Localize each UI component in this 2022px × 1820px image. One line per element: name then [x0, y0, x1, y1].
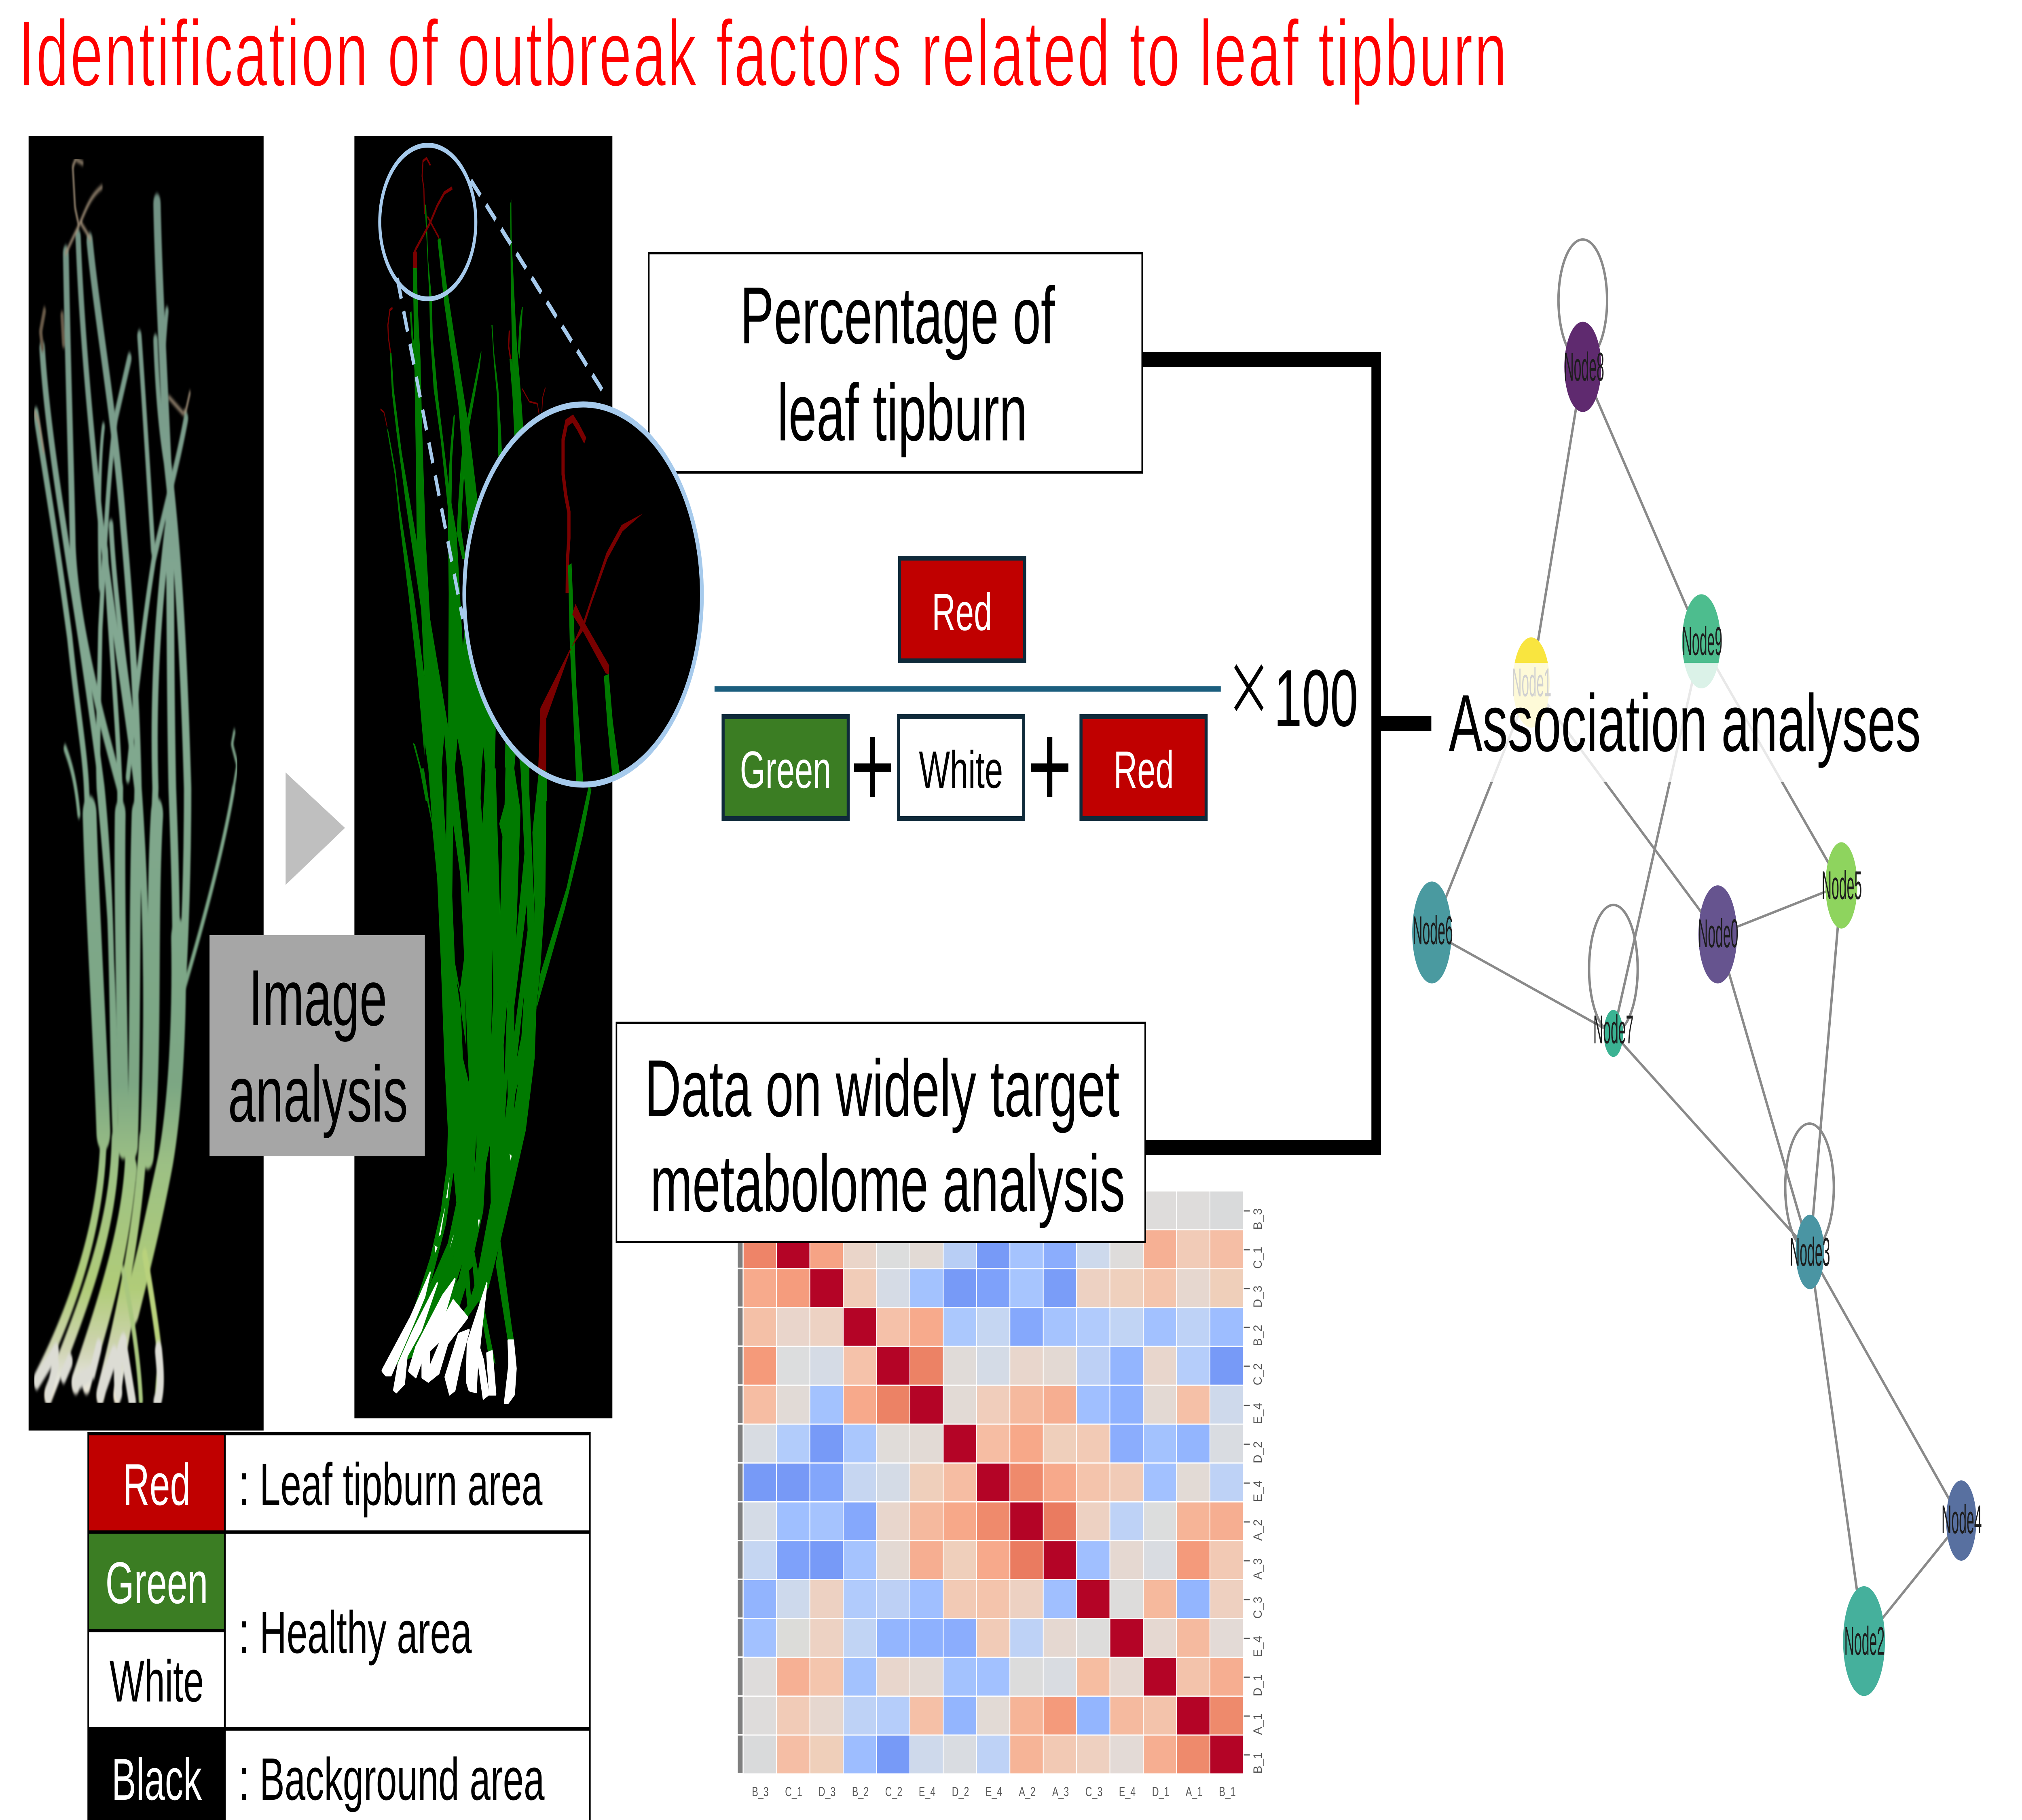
heatmap row labels: E_4 [1251, 1636, 1265, 1657]
heatmap column labels: B_2 [852, 1784, 869, 1799]
heatmap row labels: E_4 [1251, 1403, 1265, 1424]
label: association analyses: Association analyses [1449, 678, 1921, 768]
heatmap row labels: D_2 [1251, 1441, 1265, 1463]
legend row: green and white: : Healthy area [239, 1599, 472, 1666]
arrow: image analysis [286, 772, 345, 885]
zoom guide dashed lines [397, 180, 607, 619]
box: percentage of leaf tipburn: leaf tipburn [777, 368, 1027, 458]
heatmap column labels: E_4 [986, 1784, 1002, 1799]
label: image analysis: Image [249, 953, 387, 1042]
denominator green [723, 717, 848, 819]
heatmap column labels: D_2 [952, 1784, 969, 1799]
graph node labels: Node7 [1593, 1007, 1633, 1052]
heatmap column labels: A_3 [1052, 1784, 1069, 1799]
heatmap column labels: A_2 [1019, 1784, 1036, 1799]
heatmap row labels: A_3 [1251, 1558, 1265, 1579]
denominator red: Red [1114, 740, 1174, 799]
box: metabolome data: metabolome analysis [650, 1139, 1125, 1229]
heatmap column labels: D_1 [1152, 1784, 1169, 1799]
leaf tip detail [381, 158, 546, 427]
heatmap column labels: B_3 [752, 1784, 769, 1799]
heatmap column labels: C_2 [885, 1784, 902, 1799]
heatmap column labels: C_1 [785, 1784, 802, 1799]
heatmap row labels: D_1 [1251, 1674, 1265, 1696]
box: percentage of leaf tipburn [649, 253, 1142, 472]
plus [1031, 737, 1068, 797]
times 100: 100 [1274, 653, 1358, 743]
panel: segmented plant image [354, 136, 612, 1418]
heatmap row labels [1251, 1208, 1265, 1773]
graph node labels: Node8 [1564, 345, 1604, 389]
legend row: green and white [89, 1534, 589, 1727]
heatmap column labels: D_3 [819, 1784, 835, 1799]
connector bracket [1143, 360, 1431, 1147]
box: percentage of leaf tipburn: Percentage of [740, 271, 1055, 361]
graph edges [1432, 239, 1961, 1641]
legend row: green and white: White [110, 1648, 204, 1714]
label: image analysis [209, 935, 425, 1156]
heatmap column labels: C_3 [1085, 1784, 1102, 1799]
legend row: green and white: Green [106, 1550, 208, 1616]
heatmap cells [738, 1191, 1243, 1773]
heatmap [738, 1191, 1265, 1799]
green lower mass [382, 734, 592, 1403]
legend row: black: Black [112, 1746, 202, 1812]
label: image analysis: analysis [228, 1049, 408, 1139]
heatmap row labels: C_2 [1251, 1363, 1265, 1385]
plus [854, 737, 891, 797]
denominator red [1081, 717, 1206, 819]
numerator red: Red [932, 582, 992, 641]
legend table [87, 1432, 591, 1820]
legend row: black: : Background area [239, 1746, 545, 1813]
numerator red [899, 558, 1025, 661]
graph node labels: Node9 [1682, 619, 1722, 664]
heatmap row labels: A_1 [1251, 1714, 1265, 1735]
formula [715, 558, 1358, 819]
graph node labels: Node3 [1790, 1230, 1830, 1275]
title: Identification of outbreak factors related to leaf tipburn [18, 1, 1507, 106]
magnified leaf tip circle [464, 404, 702, 785]
denominator white [899, 717, 1024, 819]
box: metabolome data [616, 1023, 1145, 1242]
times 100 [1226, 631, 1358, 743]
fraction line [715, 686, 1221, 692]
box: metabolome data: Data on widely target [645, 1043, 1119, 1134]
graph node labels [1413, 345, 1982, 1664]
heatmap row labels: A_2 [1251, 1519, 1265, 1541]
white leaf bases [382, 1273, 516, 1403]
heatmap row labels: E_4 [1251, 1481, 1265, 1502]
graph node labels: Node1 [1512, 660, 1551, 705]
network graph [1412, 239, 1982, 1696]
heatmap row labels: B_1 [1251, 1752, 1265, 1773]
graph node labels: Node0 [1698, 911, 1738, 956]
heatmap row labels: C_3 [1251, 1597, 1265, 1619]
legend row: red [89, 1435, 589, 1530]
heatmap column labels [752, 1784, 1236, 1799]
heatmap column labels: E_4 [1119, 1784, 1136, 1799]
denominator green: Green [740, 740, 831, 799]
small circle highlight [380, 145, 476, 299]
graph node labels: Node2 [1844, 1619, 1885, 1664]
heatmap row ticks [1244, 1211, 1250, 1755]
green upper leaves [387, 199, 547, 801]
heatmap column labels: E_4 [919, 1784, 935, 1799]
heatmap row labels: D_3 [1251, 1286, 1265, 1308]
graph node labels: Node4 [1942, 1498, 1982, 1542]
heatmap column labels: B_1 [1219, 1784, 1236, 1799]
heatmap row labels: C_1 [1251, 1247, 1265, 1269]
heatmap column labels: A_1 [1186, 1784, 1202, 1799]
graph node labels: Node5 [1822, 863, 1862, 908]
magnified tipburn leaves [538, 419, 643, 785]
legend row: black [112, 1731, 589, 1820]
heatmap row labels: B_3 [1251, 1208, 1265, 1230]
panel: original plant photo [29, 136, 264, 1431]
heatmap row labels: B_2 [1251, 1325, 1265, 1346]
graph node labels: Node6 [1413, 908, 1453, 953]
graph nodes [1412, 322, 1976, 1696]
denominator white: White [919, 740, 1003, 799]
times 100: × [1226, 631, 1271, 736]
legend row: red: : Leaf tipburn area [239, 1451, 543, 1518]
legend row: red: Red [123, 1452, 190, 1517]
